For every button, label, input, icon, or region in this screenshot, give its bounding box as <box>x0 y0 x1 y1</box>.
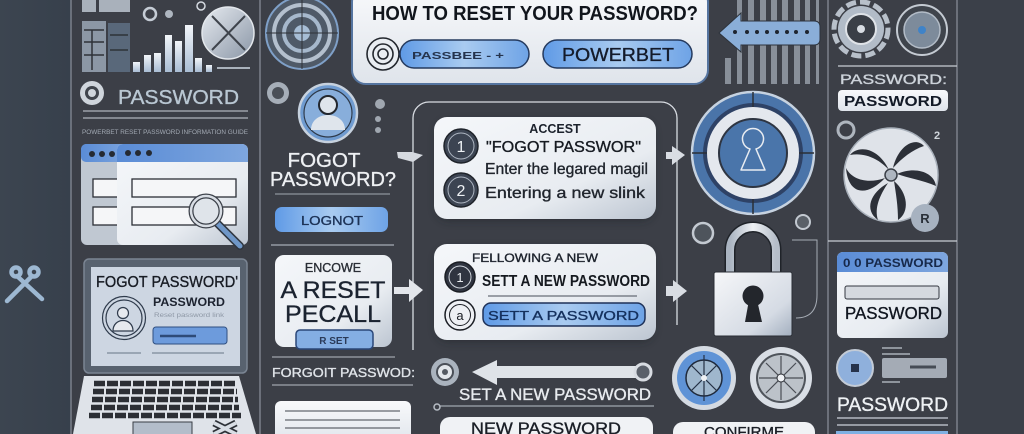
card: password form: 0 0 PASSWORD <box>843 258 943 270</box>
title panel <box>352 0 708 84</box>
button: set a password: SETT A PASSWORD <box>488 308 639 323</box>
password heading: left: PASSWORD <box>118 86 239 109</box>
password heading: left <box>80 81 249 136</box>
icon: swirl: 2 <box>934 130 940 142</box>
laptop: FOGOT PASSWORD' <box>96 274 238 291</box>
button: reset: R SET <box>319 336 349 347</box>
label: forgot password: FORGOIT PASSWOD: <box>272 365 415 380</box>
card: step one: Enter the legared magil <box>485 161 648 178</box>
icon: target dial <box>266 0 338 69</box>
keyboard <box>73 376 256 434</box>
arrow: out of step two <box>666 280 687 302</box>
label: password and powerbet: PASSWORD <box>837 394 948 416</box>
card: reset recall: ENCOWE <box>305 261 361 275</box>
badge: one <box>444 129 478 163</box>
icon: blue dial <box>672 346 736 410</box>
button: powerbet: POWERBET <box>562 44 674 65</box>
title: HOW TO RESET YOUR PASSWORD? <box>372 2 698 25</box>
label: set a new password: SET A NEW PASSWORD <box>459 386 651 404</box>
arrow: into step one <box>397 152 423 162</box>
card: lined note <box>275 401 411 434</box>
password heading: left: POWERBET RESET PASSWORD INFORMATION GUIDE <box>82 129 249 136</box>
label: password and powerbet <box>836 394 948 434</box>
card: reset recall: PECALL <box>285 301 381 328</box>
badge: one: 1 <box>457 139 466 156</box>
card: step two <box>434 244 656 342</box>
button: new password <box>440 417 653 434</box>
password label: right: PASSWORD <box>844 93 942 110</box>
heading: forgot password: FOGOT <box>288 149 361 172</box>
icon: padlock <box>714 227 792 336</box>
badge: two: 2 <box>457 183 466 200</box>
icon: ring <box>367 38 399 70</box>
card: reset recall <box>275 255 392 349</box>
badge: three: 1 <box>456 270 464 285</box>
browser windows with magnifier <box>81 144 248 246</box>
heading: forgot password: PASSWORD? <box>270 168 396 191</box>
icon: gear <box>834 2 888 56</box>
icon cluster: top left building and bar chart <box>82 0 250 72</box>
button: password <box>400 40 529 68</box>
card: step one: Entering a new slink <box>485 185 646 202</box>
label: set a new password <box>434 386 654 410</box>
icon cluster: small dots beside steps <box>375 99 385 133</box>
button: password: PASSBEE - + <box>412 50 504 62</box>
icon: swirl: R <box>920 211 930 226</box>
button: lognot: LOGNOT <box>301 214 363 228</box>
laptop: Reset password link <box>154 312 225 319</box>
laptop <box>73 259 256 434</box>
widget: toggle <box>837 348 947 386</box>
card: step one <box>434 117 656 221</box>
button: set a password <box>483 303 645 326</box>
card: password form: PASSWORD <box>845 303 942 323</box>
button: lognot <box>271 207 394 245</box>
icon: grey dial <box>750 347 812 409</box>
card: step two: FELLOWING A NEW <box>472 251 599 265</box>
icon: user circle <box>267 82 357 142</box>
badge: four: a <box>456 308 464 323</box>
heading: forgot password <box>270 149 396 194</box>
password label: right <box>838 66 957 111</box>
button: confirme <box>673 422 815 434</box>
icon: magnifier <box>191 196 240 246</box>
badge: four <box>445 300 475 330</box>
label: forgot password <box>272 357 415 385</box>
card: step one: ACCEST <box>529 122 581 136</box>
step frame <box>413 102 677 350</box>
icon: scissors cross <box>7 268 42 301</box>
arrow: out of step one <box>666 146 685 165</box>
icon: keyhole dial <box>692 92 814 214</box>
arrow <box>719 13 820 52</box>
bar chart <box>133 25 212 72</box>
button: powerbet <box>543 40 692 68</box>
card: step one: "FOGOT PASSWOR" <box>486 139 641 156</box>
stripes and back arrow <box>719 0 820 84</box>
arrow: set a new password <box>431 358 651 386</box>
password label: right: PASSWORD: <box>840 72 947 87</box>
card: step two: SETT A NEW PASSWORD <box>482 273 650 290</box>
badge: three <box>445 262 475 292</box>
laptop: PASSWORD <box>153 295 225 309</box>
arrow: into step two <box>394 279 423 302</box>
card: password form <box>837 252 948 338</box>
icon: crossed circle <box>202 7 254 59</box>
icon: avatar <box>102 296 146 340</box>
icon: fingerprint disc <box>897 5 947 55</box>
badge: two <box>444 173 478 207</box>
icon: small ring <box>693 215 817 318</box>
icon: swirl <box>828 122 957 241</box>
card: reset recall: A RESET <box>280 277 386 304</box>
